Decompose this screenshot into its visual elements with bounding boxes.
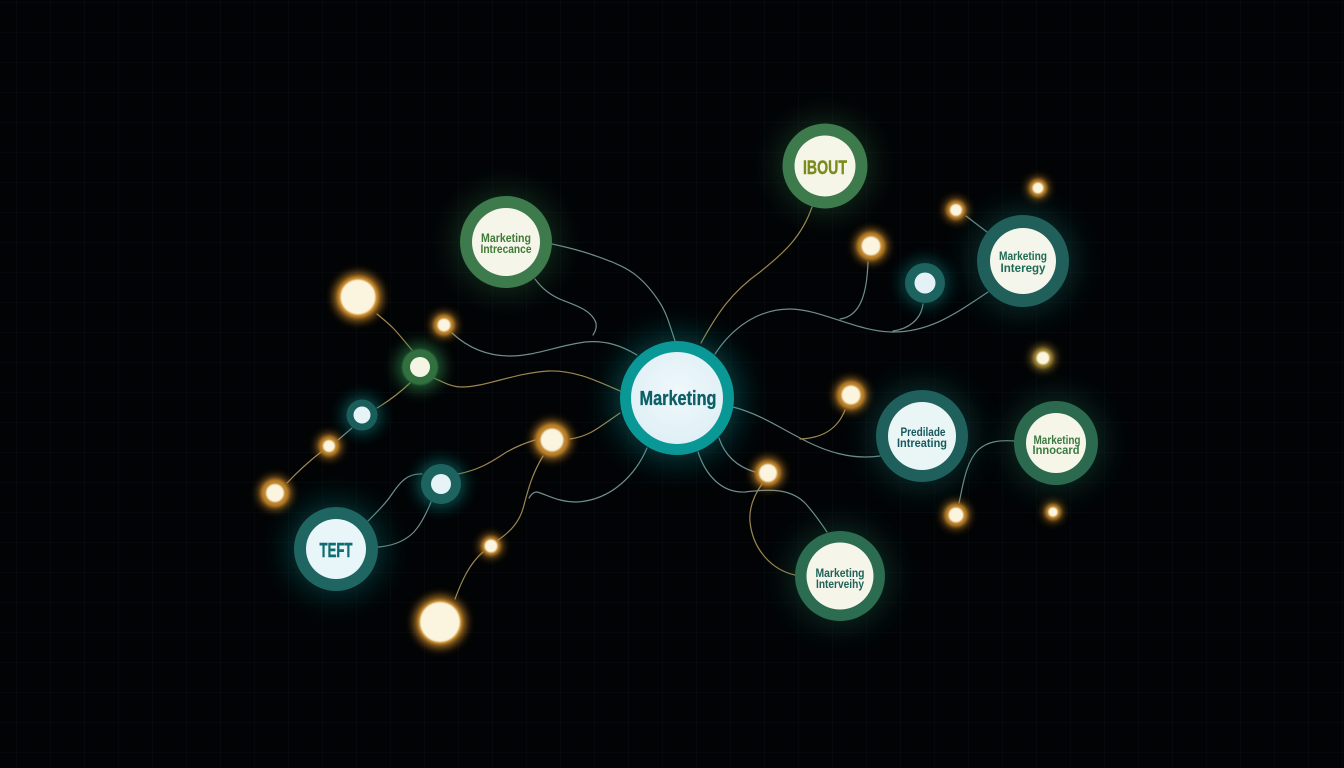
central node: Marketing (613, 334, 741, 462)
connector: centre to Marketing Interegy (715, 292, 988, 354)
amber dot (317, 434, 341, 458)
label: Marketing Innocard: Innocard (1032, 445, 1080, 457)
amber dot (753, 458, 783, 488)
amber dot (432, 313, 456, 337)
amber dot (1044, 503, 1062, 521)
connector: centre to bottom Marketing node (698, 452, 827, 532)
connector lines (287, 207, 1015, 599)
node: IBOUT (779, 120, 871, 212)
label: Marketing Interveihy: Marketing (816, 566, 864, 580)
node: Marketing Interegy (973, 211, 1073, 311)
node: TEFT (290, 503, 382, 595)
connector: Marketing Intrecance branch (535, 279, 596, 335)
label: Marketing Intrecance: Marketing (481, 231, 531, 245)
amber dot (1031, 346, 1055, 370)
label: Marketing Intrecance: Intrecance (480, 242, 532, 256)
node: Marketing Innocard (1010, 397, 1102, 489)
amber dot: large upper left (334, 273, 382, 321)
label: Marketing Innocard: Marketing (1034, 435, 1080, 447)
green dot node (396, 343, 444, 391)
label: Predilade Intreating: Intreating (897, 436, 947, 450)
amber dot: large bottom (414, 596, 466, 648)
label: TEFT: TEFT (320, 540, 352, 562)
connector: TEFT to teal node lower (378, 502, 431, 547)
teal dot node upper right (900, 258, 950, 308)
connector: teal node to amber node (338, 428, 352, 440)
node: Marketing Intrecance (456, 192, 556, 292)
label: Marketing Interveihy: Interveihy (816, 577, 864, 591)
connector: TEFT to teal node upper (368, 474, 422, 521)
connector: small amber node to centre (452, 333, 637, 356)
amber dot (945, 199, 967, 221)
connector: small amber node to Marketing Interegy (966, 216, 987, 232)
connector: IBOUT to centre (701, 207, 812, 343)
connector: small node to large cream node (455, 552, 483, 599)
node: Marketing Interveihy (791, 527, 889, 625)
amber dot (1028, 178, 1048, 198)
label: Marketing Interegy: Marketing (999, 249, 1047, 263)
label: Marketing: Marketing (640, 388, 716, 410)
teal dot node left (342, 395, 382, 435)
label: Marketing Intrecance (480, 231, 532, 256)
connector: amber node to small node (498, 456, 543, 540)
connector: centre to loose squiggle end (529, 448, 647, 502)
connector: teal node to amber node (458, 440, 535, 474)
label: Marketing Interegy (999, 249, 1047, 275)
connector: large amber node to green node (377, 314, 412, 350)
connector: green node to centre (434, 371, 620, 391)
connector: amber node to main branch (840, 262, 868, 319)
amber dot (533, 421, 571, 459)
label: Marketing Innocard (1032, 435, 1080, 457)
amber dot (855, 230, 887, 262)
label: Marketing Interveihy (816, 566, 864, 591)
teal dot node lower (416, 459, 466, 509)
connector: centre to Predilade (733, 407, 880, 457)
connector: amber node to centre (570, 413, 620, 439)
connector: amber node to bottom Marketing node (750, 484, 795, 575)
connector: Marketing Intrecance to centre (552, 244, 675, 341)
label: IBOUT: IBOUT (803, 158, 847, 179)
label: Predilade Intreating (897, 425, 947, 450)
connector: amber node to Predilade branch (800, 410, 845, 439)
label: Marketing Interegy: Interegy (1000, 261, 1046, 275)
connector: green node to teal node (377, 383, 410, 408)
connector: teal node to main branch (893, 304, 923, 331)
connector: Marketing Innocard to amber node (959, 441, 1015, 503)
amber dot (835, 379, 867, 411)
node: Predilade Intreating (872, 386, 972, 486)
connector: centre to amber node (719, 438, 755, 472)
amber dot (259, 477, 291, 509)
amber dot (480, 535, 502, 557)
connector: amber node to far left node (287, 452, 321, 483)
label: Predilade Intreating: Predilade (900, 425, 946, 439)
amber dot (943, 502, 969, 528)
